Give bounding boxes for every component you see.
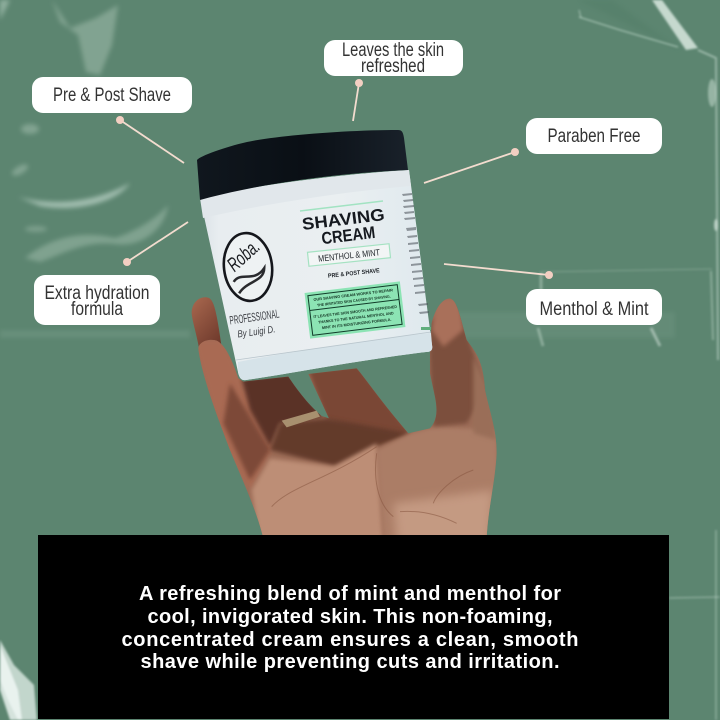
ring on finger	[282, 411, 320, 427]
brand text: PROFESSIONAL	[229, 307, 280, 327]
green info box	[305, 281, 405, 339]
jar neck band	[200, 170, 411, 218]
pointer: extra hydration	[123, 222, 188, 266]
callout: menthol and mint: Menthol & Mint	[540, 299, 649, 320]
side ingredients text	[402, 193, 429, 314]
pre and post shave: PRE & POST SHAVE	[328, 268, 380, 280]
product title: SHAVING	[301, 205, 386, 234]
description panel	[38, 535, 669, 719]
callout: paraben free: Paraben Free	[548, 126, 640, 147]
callout: extra hydration formula: formula	[71, 299, 123, 320]
pointer: pre and post shave	[116, 116, 184, 163]
logo: Roba.	[223, 236, 265, 276]
description text: A refreshing blend of mint and menthol for	[139, 583, 561, 605]
description text: shave while preventing cuts and irritation.	[140, 651, 560, 673]
pointer: paraben free	[424, 148, 519, 183]
menthol and mint tag: MENTHOL & MINT	[318, 247, 381, 264]
description text	[122, 583, 578, 673]
menthol and mint tag	[307, 244, 391, 266]
jar base band	[238, 333, 432, 380]
callout: leaves the skin refreshed: Leaves the skin	[342, 40, 444, 61]
palm creases	[272, 447, 473, 523]
description text: concentrated cream ensures a clean, smooth	[122, 629, 578, 651]
brand text	[229, 307, 282, 341]
callout: extra hydration formula: Extra hydration	[44, 283, 150, 304]
callout: menthol and mint	[526, 289, 662, 325]
callout: pre and post shave	[32, 77, 192, 113]
callout: leaves the skin refreshed: refreshed	[361, 56, 425, 77]
jar	[197, 130, 432, 380]
callout: leaves the skin refreshed	[324, 40, 463, 77]
index fingertip behind jar	[192, 297, 222, 353]
hand base	[198, 299, 497, 538]
green info box: THE IRRITATED SKIN CAUSED BY SHAVING.	[317, 295, 391, 308]
brand text: By Luigi D.	[237, 324, 276, 340]
product title second line: CREAM	[320, 223, 376, 248]
logo	[220, 230, 276, 304]
description text: cool, invigorated skin. This non-foaming,	[148, 606, 552, 628]
pointer: menthol and mint	[444, 264, 553, 279]
green info box: OUR SHAVING CREAM WORKS TO REPAIR	[313, 288, 393, 302]
callout: paraben free	[526, 118, 662, 154]
green info box: MINT IN ITS MOISTURIZING FORMULA.	[322, 318, 392, 330]
hand holding the jar	[192, 297, 500, 543]
green info box: IT LEAVES THE SKIN SMOOTH AND REFRESHED	[313, 305, 397, 319]
jar body	[200, 170, 432, 380]
green info box: THANKS TO THE NATURAL MENTHOL AND	[318, 311, 394, 325]
hand shading	[193, 297, 500, 543]
callout: extra hydration formula	[34, 275, 160, 325]
green barcode mark	[421, 327, 431, 330]
pointer: leaves the skin refreshed	[353, 79, 363, 121]
callout: pre and post shave: Pre & Post Shave	[53, 85, 171, 106]
label accent line	[300, 201, 383, 211]
jar lid	[197, 130, 408, 200]
